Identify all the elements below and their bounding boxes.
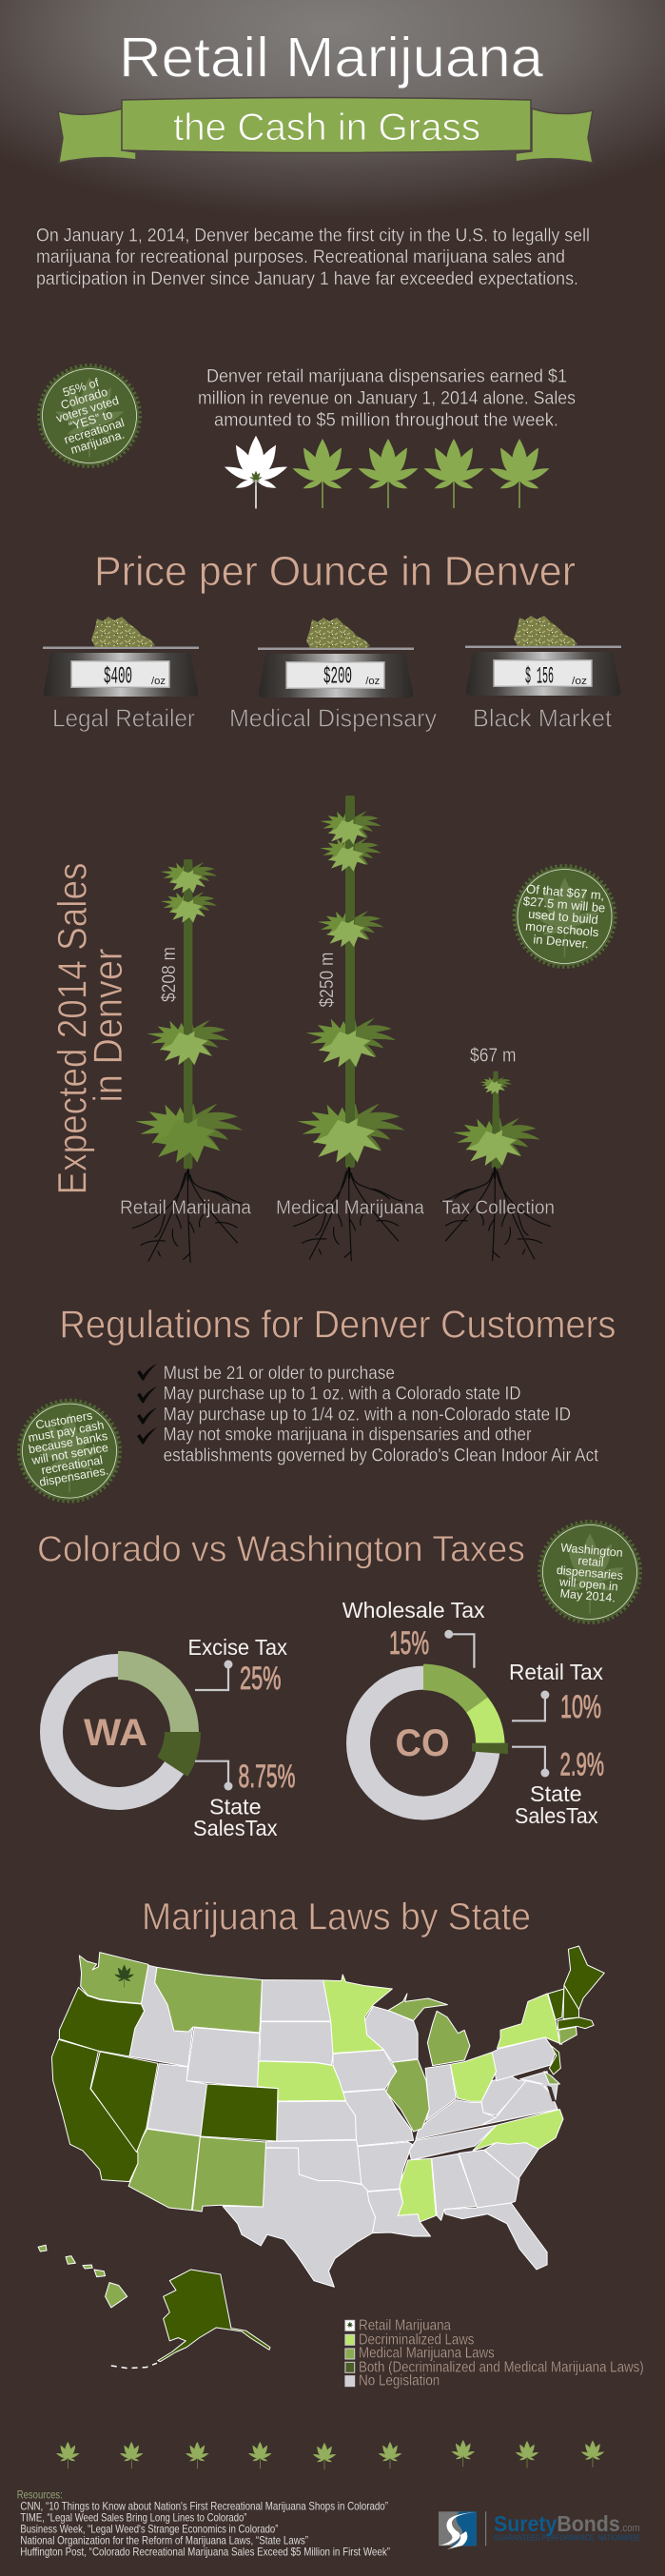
badge: Washington opening: retail (577, 1554, 604, 1569)
label: state sales tax: State (530, 1781, 582, 1806)
swatch: decriminalized (345, 2334, 355, 2345)
price labels (52, 703, 613, 732)
five leaf icons: $5 million (223, 436, 551, 508)
plant value labels: $208 m (159, 947, 180, 1002)
states: medical marijuana laws (79, 1953, 577, 2212)
plant name labels (120, 1197, 555, 1218)
segment: state sales tax 8.75% (157, 1732, 201, 1777)
badge: customers pay cash: because banks (28, 1429, 108, 1456)
chart: medical marijuana plant (294, 796, 405, 1261)
intro paragraph: On January 1, 2014, Denver became the first city in the U.S. to legally sell (36, 226, 590, 246)
plant name labels: Retail Marijuana (120, 1197, 252, 1218)
badge: 55% of Colorado voters: recreational (63, 416, 126, 447)
resources list: TIME, “Legal Weed Sales Bring Long Lines to Colorado” (20, 2511, 247, 2525)
list text: May not smoke marijuana in dispensaries and other (164, 1426, 532, 1445)
badge: Washington opening: dispensaries (556, 1563, 623, 1583)
icon: leaf on Washington (114, 1964, 135, 1988)
Chesapeake Bay (547, 2086, 556, 2101)
scale: medical dispensary $200 (258, 618, 414, 698)
icon: check 2 (137, 1386, 157, 1403)
value: 2.9%: 2.9% (559, 1747, 604, 1783)
plant value labels: $250 m (317, 952, 338, 1007)
list text: May purchase up to 1/4 oz. with a non-Colorado state ID (164, 1405, 571, 1425)
dot: state (540, 1768, 549, 1778)
intro paragraph: participation in Denver since January 1 have far exceeded expectations. (36, 269, 578, 289)
badge: 55% of Colorado voters: 55% of (61, 376, 101, 400)
badge: 55% of Colorado voters: “YES” to (68, 407, 114, 433)
icon: check 4 (137, 1427, 157, 1445)
chart: tax collection plant (441, 1072, 550, 1261)
badge: customers pay cash: must pay cash (28, 1418, 105, 1445)
icon: white leaf (223, 436, 289, 508)
badge: 55% of Colorado voters (39, 365, 140, 466)
badge: Washington opening (539, 1522, 640, 1622)
label: excise tax: Excise Tax (188, 1635, 287, 1660)
swatch: both (345, 2362, 355, 2372)
connector: excise (195, 1664, 228, 1690)
dot: excise (225, 1660, 232, 1669)
resources list: Huffington Post, “Colorado Recreational Marijuana Sales Exceed $5 Million in First Week” (20, 2546, 390, 2559)
label: state sales tax (193, 1795, 278, 1840)
label: state sales tax: SalesTax (515, 1803, 598, 1828)
logo domain: .com (620, 2523, 640, 2534)
legend labels: No Legislation (359, 2373, 440, 2389)
label: state sales tax: State (209, 1795, 262, 1819)
heading: price per ounce: Price per Ounce in Denver (94, 548, 576, 595)
badge: customers pay cash: recreational (40, 1453, 104, 1477)
price labels: Black Market (473, 703, 613, 732)
map legend (345, 2317, 644, 2389)
WA callouts (188, 1635, 295, 1840)
plant name labels: Medical Marijuana (276, 1197, 425, 1218)
legend labels: Medical Marijuana Laws (359, 2346, 495, 2362)
badge: Washington opening: Washington (560, 1541, 623, 1560)
chart: retail marijuana plant (132, 859, 243, 1263)
sales paragraph: amounted to $5 million throughout the week. (214, 410, 558, 430)
sales paragraph (198, 367, 576, 430)
ribbon left tail (58, 108, 136, 163)
ribbon banner with subtitle (58, 97, 593, 163)
badge: customers pay cash: Customers (34, 1408, 93, 1432)
chart: WA donut (51, 1651, 201, 1799)
logo tagline: GUARANTEED PERFORMANCE, NATIONWIDE (494, 2533, 640, 2542)
scale: medical dispensary $200: $200 (323, 662, 352, 690)
heading: regulations: Regulations for Denver Customers (59, 1303, 616, 1347)
value: 15%: 15% (389, 1625, 429, 1662)
scale: legal retailer $400 (43, 617, 199, 697)
ribbon main band (122, 97, 531, 152)
list text (164, 1364, 599, 1465)
badge: 55% of Colorado voters: voters voted (54, 394, 121, 425)
dot: state (225, 1781, 232, 1791)
badge: customers pay cash (19, 1401, 120, 1502)
logo divider (485, 2511, 486, 2546)
connector: state (512, 1747, 545, 1773)
list text: establishments governed by Colorado's Clean Indoor Air Act (164, 1445, 599, 1465)
icon: check 1 (137, 1364, 157, 1380)
donut ring (51, 1665, 185, 1799)
badge: 55% of Colorado voters: Colorado (59, 385, 109, 412)
badge: schools funding: used to build (528, 907, 598, 927)
logo: SuretyBonds.com (439, 2511, 640, 2549)
dot: retail (540, 1690, 549, 1700)
resources (17, 2488, 390, 2559)
states: both laws (51, 1946, 604, 2182)
value: 25%: 25% (240, 1661, 282, 1697)
subtitle: the Cash in Grass (173, 107, 480, 148)
dot: wholesale (444, 1630, 453, 1639)
badge: schools funding: more schools (525, 918, 599, 939)
resources heading: Resources: (17, 2488, 63, 2502)
badge: schools funding: Of that $67 m, (526, 881, 605, 903)
segment: state sales tax 2.9% (472, 1743, 508, 1754)
badge: Washington opening: May 2014. (559, 1586, 616, 1604)
swatch: medical (345, 2349, 355, 2359)
CO label: CO (396, 1722, 449, 1764)
label: wholesale tax: Wholesale Tax (342, 1598, 485, 1622)
scale: legal retailer $400: /oz (151, 676, 166, 687)
resources list (20, 2500, 390, 2559)
intro paragraph: marijuana for recreational purposes. Recreational marijuana sales and (36, 247, 565, 267)
label: state sales tax (515, 1781, 598, 1828)
logo mark (439, 2511, 477, 2549)
icon: green leaf 5 (488, 439, 551, 508)
badge: 55% of Colorado voters: marijuana. (69, 428, 126, 457)
CO callouts (342, 1598, 604, 1828)
sales paragraph: Denver retail marijuana dispensaries earned $1 (206, 367, 567, 387)
badge: schools funding: $27.5 m will be (522, 894, 606, 915)
label: state sales tax: SalesTax (193, 1816, 278, 1840)
connector: wholesale (449, 1634, 474, 1668)
donut ring (358, 1678, 489, 1808)
price labels: Medical Dispensary (229, 703, 437, 732)
scale: black market $156: /oz (572, 676, 587, 687)
logo wordmark: SuretyBonds (494, 2511, 620, 2536)
leaf divider row (55, 2440, 605, 2469)
resources list: Business Week, “Legal Weed's Strange Economics in Colorado” (20, 2523, 278, 2536)
plant value labels: $67 m (470, 1046, 516, 1067)
Alaska (158, 2270, 270, 2362)
segment: wholesale tax 15% (423, 1664, 488, 1713)
segment: retail tax 10% (466, 1698, 505, 1743)
connector: state (195, 1761, 228, 1786)
states: no legislation (129, 1965, 557, 2287)
WA label: WA (84, 1712, 147, 1754)
heading: taxes: Colorado vs Washington Taxes (37, 1530, 525, 1570)
resources list: National Organization for the Reform of Marijuana Laws, “State Laws” (20, 2534, 308, 2547)
top grey glow (0, 0, 665, 224)
segment: excise tax 25% (118, 1651, 199, 1732)
resources list: CNN, “10 Things to Know about Nation's First Recreational Marijuana Shops in Colorado” (20, 2500, 388, 2513)
badge: Washington opening: will open in (557, 1575, 618, 1594)
plant value labels (159, 947, 516, 1067)
value: 10%: 10% (560, 1689, 601, 1725)
intro paragraph (36, 226, 590, 289)
title: Retail Marijuana (119, 26, 543, 88)
scale: black market $156: $ 156 (525, 662, 554, 690)
legend labels (359, 2317, 644, 2389)
vertical heading: expected 2014 sales (49, 862, 131, 1195)
vertical heading: expected 2014 sales: in Denver (86, 948, 131, 1102)
legend labels: Retail Marijuana (359, 2317, 451, 2333)
US map (38, 1946, 604, 2369)
badge: customers pay cash: will not service (29, 1441, 109, 1467)
value: 8.75%: 8.75% (238, 1759, 295, 1795)
icon: green leaf 2 (291, 439, 354, 508)
scale: medical dispensary $200: /oz (365, 676, 380, 687)
icon: check 3 (137, 1407, 157, 1424)
Hawaii (38, 2245, 127, 2308)
states: decriminalized laws (258, 1975, 563, 2222)
scale: black market $156 (465, 616, 621, 696)
badge: schools funding: in Denver. (533, 932, 590, 951)
icon: green leaf 4 (422, 439, 485, 508)
legend labels: Decriminalized Laws (359, 2331, 474, 2348)
icon: swatch leaf (346, 2322, 353, 2330)
swatch: retail marijuana (345, 2320, 355, 2330)
vertical heading: expected 2014 sales: Expected 2014 Sales (49, 862, 95, 1195)
badge: customers pay cash: dispensaries. (38, 1464, 109, 1489)
scale: legal retailer $400: $400 (104, 662, 132, 690)
sales paragraph: million in revenue on January 1, 2014 alone. Sales (198, 388, 576, 409)
plant name labels: Tax Collection (441, 1197, 555, 1218)
chart: CO donut (358, 1664, 508, 1808)
swatch: no legislation (345, 2376, 355, 2387)
price labels: Legal Retailer (52, 703, 195, 732)
heading: laws by state: Marijuana Laws by State (142, 1896, 531, 1937)
icon: green leaf 3 (357, 439, 420, 508)
Aleutian islands (111, 2363, 157, 2369)
list text: May purchase up to 1 oz. with a Colorado state ID (164, 1385, 521, 1405)
list text: Must be 21 or older to purchase (164, 1364, 395, 1384)
badge: schools funding (514, 866, 615, 967)
ribbon right tail (516, 108, 593, 163)
regulations check list (137, 1364, 599, 1465)
connector: retail (512, 1695, 545, 1721)
label: retail tax: Retail Tax (509, 1660, 603, 1684)
